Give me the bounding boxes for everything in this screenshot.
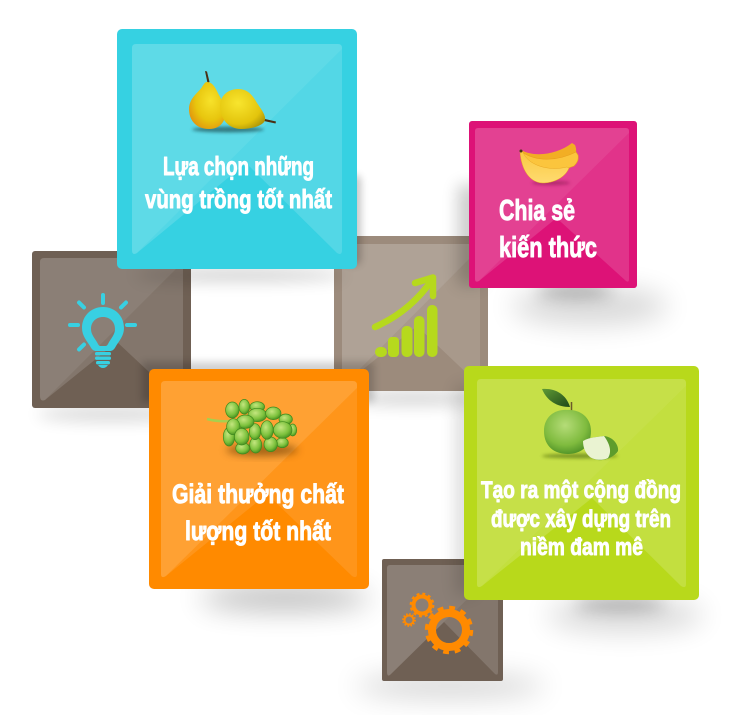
heading: pink card: kiến thức bbox=[499, 232, 597, 264]
heading: green card: niềm đam mê bbox=[520, 534, 643, 561]
facet: pink top-left bbox=[475, 128, 629, 282]
heading: cyan card: Lựa chọn những bbox=[163, 151, 314, 181]
shadow: gears card bbox=[355, 676, 545, 696]
shadow: lightbulb card bbox=[37, 407, 187, 421]
heading: pink card bbox=[499, 195, 597, 264]
shadow: orange card bbox=[142, 362, 374, 609]
panel: cyan growing regions card bbox=[117, 29, 361, 281]
panel: brown growth chart card bbox=[334, 236, 488, 405]
image: grapes bbox=[207, 399, 298, 456]
panel: pink knowledge card bbox=[458, 121, 668, 324]
heading: pink card: Chia sẻ bbox=[499, 195, 575, 227]
heading: orange card bbox=[172, 479, 344, 546]
card base: chart bbox=[334, 236, 488, 391]
panel: brown gears card bbox=[355, 559, 545, 696]
icon: rising bar chart with arrow bbox=[375, 278, 438, 357]
card base: gears bbox=[382, 559, 503, 681]
card base: lightbulb bbox=[32, 251, 191, 408]
image: pears bbox=[189, 71, 276, 132]
shadow: pink card bbox=[458, 185, 668, 324]
icon: gears bbox=[403, 594, 471, 652]
facet: gears right bbox=[390, 569, 498, 675]
facet: orange right bbox=[166, 388, 357, 577]
shadow: green card bbox=[456, 385, 703, 631]
facet: green right bbox=[482, 386, 686, 587]
shadow: chart card bbox=[345, 391, 485, 405]
panel: green community card bbox=[456, 366, 703, 631]
heading: cyan card: vùng trồng tốt nhất bbox=[145, 184, 332, 214]
panel: orange quality award card bbox=[142, 362, 374, 609]
facet: chart top-left bbox=[342, 244, 480, 384]
facet: orange top-left bbox=[161, 381, 357, 577]
heading: orange card: lượng tốt nhất bbox=[185, 516, 331, 546]
image: bananas bbox=[520, 143, 578, 185]
heading: green card: Tạo ra một cộng đồng bbox=[481, 477, 681, 504]
card base: pink bbox=[469, 121, 637, 288]
card base: orange bbox=[149, 369, 369, 589]
panel: brown lightbulb card bbox=[32, 251, 191, 421]
facet: cyan top-left bbox=[132, 44, 342, 254]
facet: pink right bbox=[479, 133, 629, 282]
facet: lightbulb top-left bbox=[40, 258, 183, 400]
heading: green card: được xây dựng trên bbox=[491, 506, 671, 533]
facet: chart right bbox=[346, 248, 480, 383]
facet: gears top-left bbox=[387, 565, 498, 676]
image: green apple bbox=[542, 389, 618, 460]
heading: cyan card bbox=[145, 151, 332, 214]
heading: green card bbox=[481, 477, 681, 561]
icon: lightbulb bbox=[68, 293, 137, 368]
facet: cyan right bbox=[137, 49, 342, 254]
facet: lightbulb right bbox=[45, 262, 183, 400]
card base: green bbox=[464, 366, 699, 600]
card base: cyan bbox=[117, 29, 357, 269]
shadow: cyan card bbox=[135, 175, 361, 281]
facet: green top-left bbox=[477, 379, 686, 587]
heading: orange card: Giải thưởng chất bbox=[172, 479, 344, 509]
